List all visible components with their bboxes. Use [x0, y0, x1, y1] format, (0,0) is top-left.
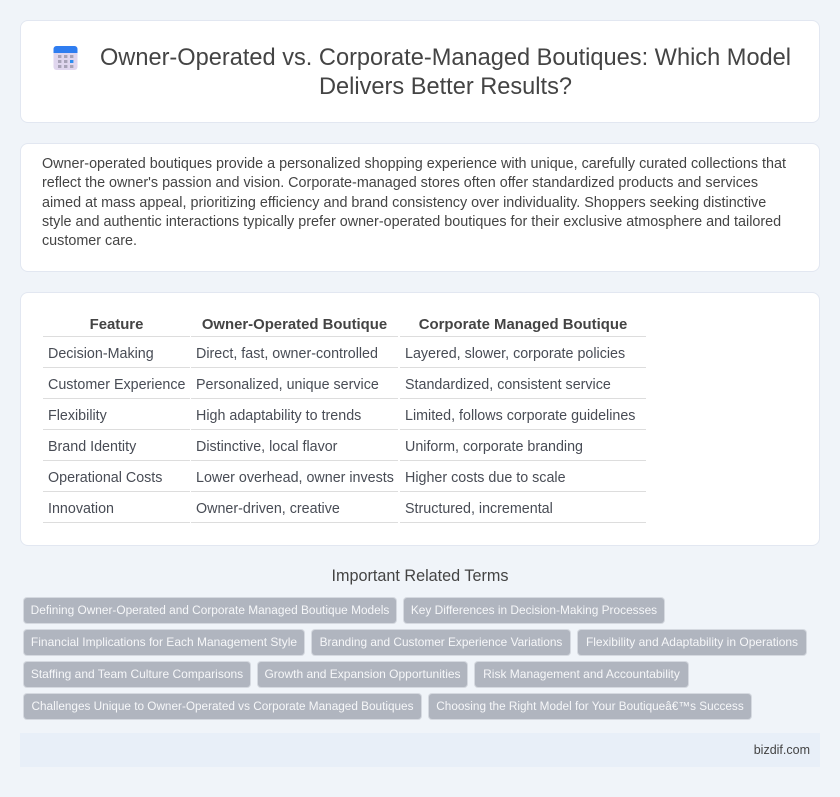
comparison table: Brand Identity [48, 439, 136, 455]
title: Delivers Better Results? [319, 74, 572, 100]
comparison table: Limited, follows corporate guidelines [405, 408, 635, 424]
related terms tags: Choosing the Right Model for Your Boutiqueâ€™s Success [436, 700, 744, 713]
title [100, 45, 791, 100]
related terms tags: Key Differences in Decision-Making Processes [411, 603, 657, 617]
title: Owner-Operated vs. Corporate-Managed Boutiques: Which Model [100, 45, 791, 71]
related terms tags: Branding and Customer Experience Variations [320, 635, 562, 649]
comparison table: Layered, slower, corporate policies [405, 346, 625, 362]
icon: calendar [54, 46, 78, 70]
comparison table: Corporate Managed Boutique [419, 317, 627, 333]
related terms tags: Staffing and Team Culture Comparisons [31, 667, 243, 681]
header card [20, 20, 820, 123]
comparison table: Personalized, unique service [196, 377, 379, 393]
comparison table: Operational Costs [48, 470, 162, 486]
comparison table: Distinctive, local flavor [196, 439, 337, 455]
intro text: Owner-operated boutiques provide a personalized shopping experience with unique, carefully curated collections that [42, 156, 786, 172]
related terms tags: Defining Owner-Operated and Corporate Managed Boutique Models [31, 603, 389, 617]
comparison table: Feature [90, 317, 143, 333]
comparison table: Uniform, corporate branding [405, 439, 583, 455]
comparison table: Flexibility [48, 408, 107, 424]
comparison table: Direct, fast, owner-controlled [196, 346, 378, 362]
footer source label: bizdif.com [754, 743, 810, 757]
comparison table: Lower overhead, owner invests [196, 470, 394, 486]
intro text: reflect the owner's passion and vision. Corporate-managed stores often offer standardized products and services [42, 175, 758, 191]
comparison table: Decision-Making [48, 346, 154, 362]
comparison table: Higher costs due to scale [405, 470, 566, 486]
comparison table: Standardized, consistent service [405, 377, 611, 393]
heading: important related terms: Important Related Terms [332, 567, 508, 585]
comparison table [43, 317, 646, 523]
panel: comparison table [20, 292, 820, 546]
intro text: customer care. [42, 233, 137, 249]
related terms tags: Financial Implications for Each Management Style [31, 635, 297, 649]
comparison table: High adaptability to trends [196, 408, 361, 424]
intro text [42, 156, 786, 249]
related terms tags: Growth and Expansion Opportunities [264, 667, 461, 681]
comparison table: Innovation [48, 501, 114, 517]
comparison table: Structured, incremental [405, 501, 553, 517]
comparison table: Owner-driven, creative [196, 501, 340, 517]
related terms tags [23, 597, 807, 720]
intro text: aimed at mass appeal, prioritizing efficiency and brand consistency over individuality. Shoppers seeking distinctive [42, 194, 766, 210]
related terms tags: Risk Management and Accountability [483, 667, 680, 681]
related terms tags: Flexibility and Adaptability in Operations [586, 635, 798, 649]
footer bar [20, 733, 820, 767]
comparison table: Customer Experience [48, 377, 185, 393]
panel: intro paragraph [20, 143, 820, 272]
intro text: style and authentic interactions typically prefer owner-operated boutiques for their exclusive atmosphere and tailored [42, 214, 781, 230]
related terms tags: Challenges Unique to Owner-Operated vs Corporate Managed Boutiques [32, 700, 413, 713]
comparison table: Owner-Operated Boutique [202, 317, 387, 333]
